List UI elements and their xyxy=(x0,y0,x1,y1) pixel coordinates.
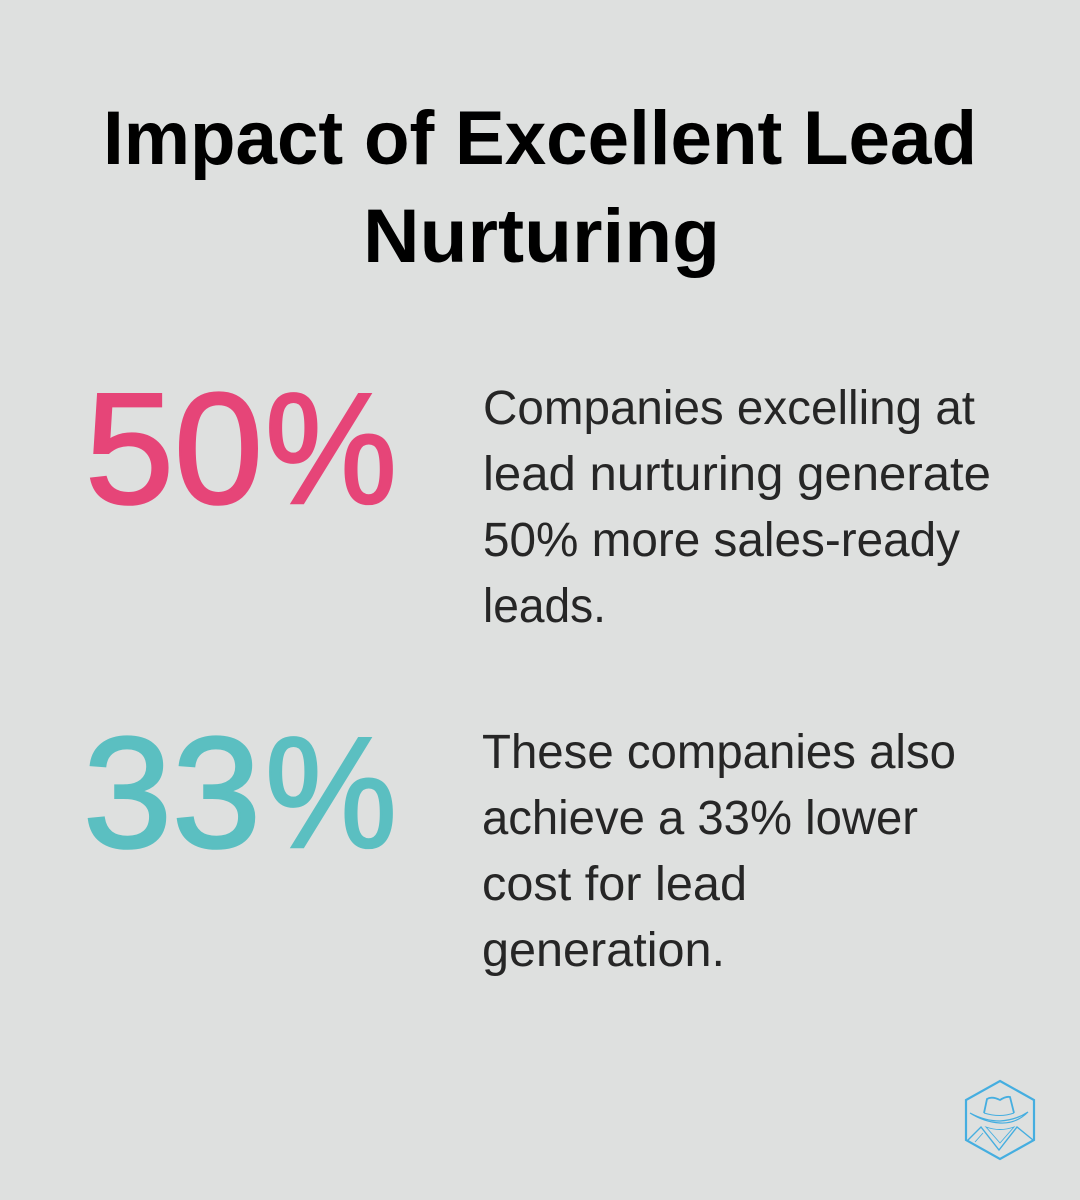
text block: 33% description: achieve a 33% lower xyxy=(482,792,918,845)
stat: 50%: % xyxy=(265,361,397,537)
text block: 33% description: generation. xyxy=(482,924,725,977)
stat: 50%: 50 xyxy=(85,361,263,537)
icon: hexagon logo with hat and coat xyxy=(966,1081,1034,1159)
stat: 33%: % xyxy=(265,705,397,881)
title: Nurturing xyxy=(363,194,720,279)
text block: 50% description: lead nurturing generate xyxy=(483,448,991,501)
text block: 50% description xyxy=(483,382,991,633)
text block: 50% description: leads. xyxy=(483,580,606,633)
stat: 33% xyxy=(83,705,397,881)
text block: 33% description: cost for lead xyxy=(482,858,747,911)
stat: 50% xyxy=(85,361,397,537)
title xyxy=(103,96,977,279)
text block: 33% description xyxy=(482,726,956,977)
text block: 50% description: Companies excelling at xyxy=(483,382,975,435)
text block: 50% description: 50% more sales-ready xyxy=(483,514,960,567)
text block: 33% description: These companies also xyxy=(482,726,956,779)
stat: 33%: 33 xyxy=(83,705,261,881)
title: Impact of Excellent Lead xyxy=(103,96,977,181)
